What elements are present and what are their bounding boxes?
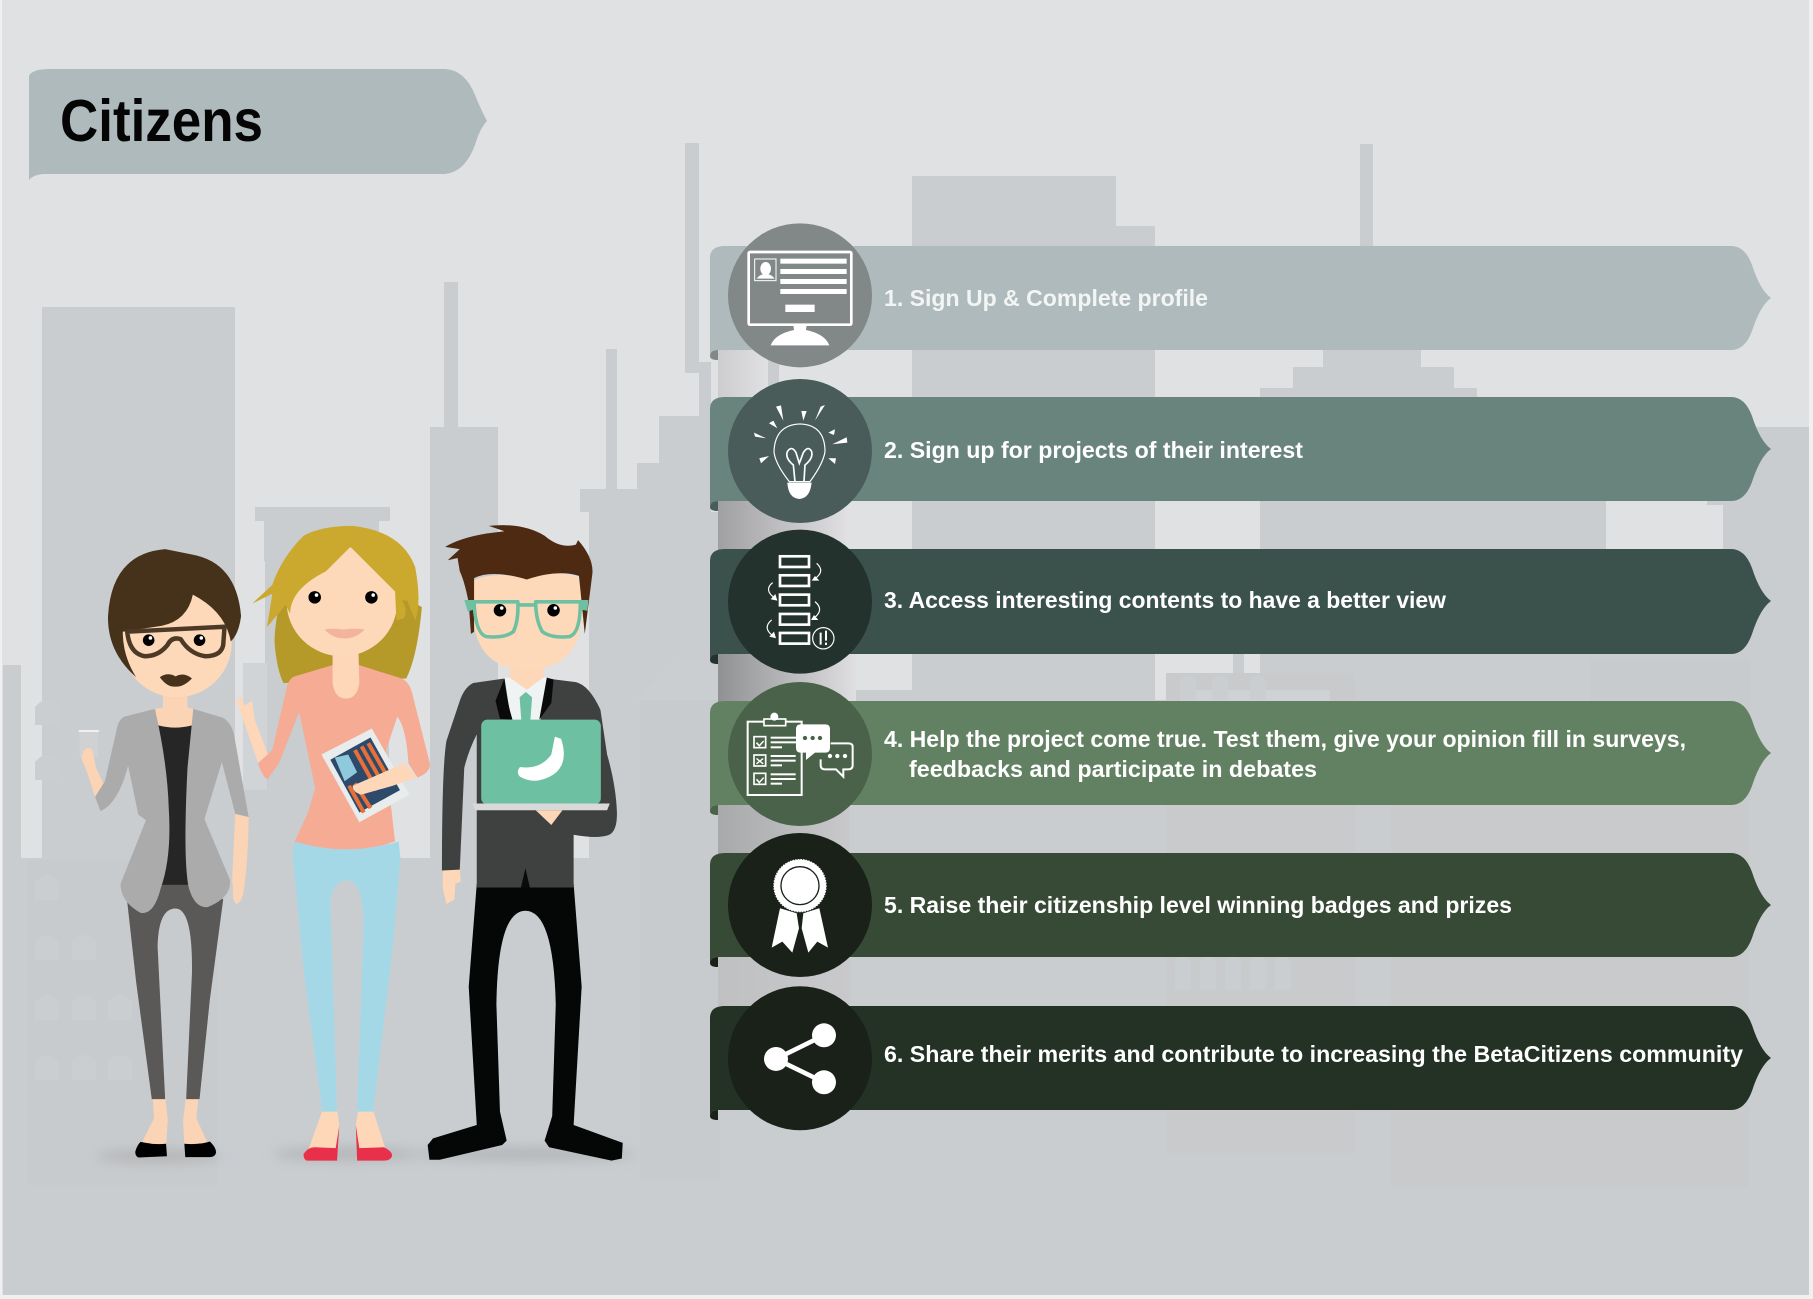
step 4 text: 4. Help the project come true. Test them, give your opinion fill in surveys, [884, 726, 1686, 752]
icon: computer profile [728, 223, 872, 367]
step 1 banner [710, 246, 1771, 360]
title text: Citizens [60, 88, 263, 154]
step 3 banner [710, 549, 1771, 664]
icon: light bulb [728, 379, 872, 523]
step 6 text: 6. Share their merits and contribute to increasing the BetaCitizens community [884, 1041, 1743, 1067]
title banner [29, 69, 487, 180]
step 6 banner [710, 1006, 1771, 1120]
character: man with laptop [413, 525, 636, 1161]
step 1 text: 1. Sign Up & Complete profile [884, 285, 1208, 311]
icon: share [728, 986, 872, 1130]
character: woman with tablet [237, 526, 430, 1161]
step 2 text: 2. Sign up for projects of their interest [884, 437, 1303, 463]
icon: survey clipboard and speech bubbles [728, 682, 872, 826]
icon: award ribbon [728, 833, 872, 977]
icon: content stack [728, 530, 872, 674]
step 4 banner [710, 701, 1771, 815]
column behind the banners [718, 350, 856, 1007]
characters group [79, 525, 636, 1162]
step 4 text line two: feedbacks and participate in debates [909, 756, 1317, 782]
faint building blocks and arched windows [27, 660, 1750, 1188]
step 2 banner [710, 397, 1771, 511]
step 5 banner [710, 853, 1771, 967]
character: woman with phone [79, 549, 249, 1162]
step 3 text: 3. Access interesting contents to have a better view [884, 587, 1447, 613]
step 5 text: 5. Raise their citizenship level winning badges and prizes [884, 892, 1512, 918]
